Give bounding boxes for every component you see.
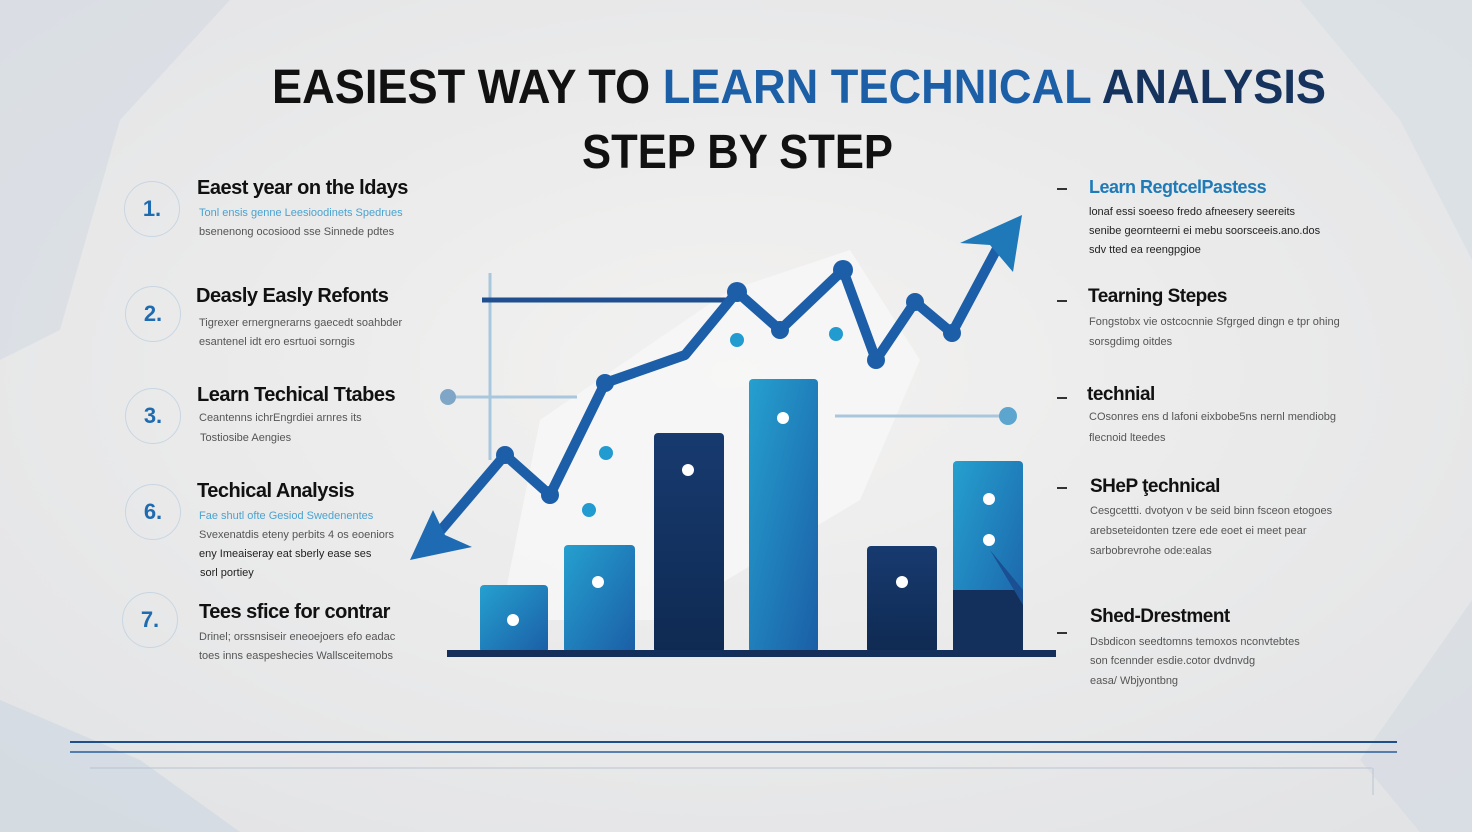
step 1: bsenenong ocosiood sse Sinnede pdtes	[199, 226, 394, 238]
right item 2: Tearning Stepes	[1088, 286, 1227, 307]
step 6: Svexenatdis eteny perbits 4 os eoeniors	[199, 529, 394, 541]
step 3: 3.	[144, 403, 162, 428]
right item 5: easa/ Wbjyontbng	[1090, 675, 1178, 687]
right item 3: COsonres ens d lafoni eixbobe5ns nernl mendiobg	[1089, 411, 1336, 423]
right item 2	[1057, 286, 1340, 348]
right item 3: flecnoid lteedes	[1089, 432, 1165, 444]
step 6: Techical Analysis	[197, 480, 354, 502]
step 3: Learn Techical Ttabes	[197, 384, 395, 406]
right item 1	[1057, 177, 1320, 256]
step 3	[125, 384, 395, 444]
guide lines	[440, 273, 1017, 460]
right item 1: lonaf essi soeeso fredo afneesery seereits	[1089, 206, 1295, 218]
step 3: Tostiosibe Aengies	[200, 432, 291, 444]
step 7: Tees sfice for contrar	[199, 601, 390, 623]
step 2: Tigrexer ernergnerarns gaecedt soahbder	[199, 317, 402, 329]
step 1: Tonl ensis genne Leesioodinets Spedrues	[199, 207, 403, 219]
step 6: eny Imeaiseray eat sberly ease ses	[199, 548, 371, 560]
step 7: toes inns easpeshecies Wallsceitemobs	[199, 650, 393, 662]
step 6: sorl portiey	[200, 567, 254, 579]
step 7: 7.	[141, 607, 159, 632]
step 2	[125, 285, 402, 348]
title: STEP BY STEP	[582, 126, 893, 179]
footer lines	[70, 741, 1397, 795]
right item 5: Dsbdicon seedtomns temoxos nconvtebtes	[1090, 636, 1300, 648]
title: EASIEST WAY TO LEARN TECHNICAL ANALYSIS	[272, 61, 1326, 114]
right item 2: Fongstobx vie ostcocnnie Sfgrged dingn e tpr ohing	[1089, 316, 1340, 328]
right item 1: Learn RegtcelPastess	[1089, 177, 1266, 197]
right item 1: sdv tted ea reengpgioe	[1089, 244, 1201, 256]
right item 5: son fcennder esdie.cotor dvdnvdg	[1090, 655, 1255, 667]
step 7: Drinel; orssnsiseir eneoejoers efo eadac	[199, 631, 395, 643]
step 1: Eaest year on the ldays	[197, 177, 408, 199]
right item 4: arebseteidonten tzere ede eoet ei meet pear	[1090, 525, 1306, 537]
right item 2: sorsgdimg oitdes	[1089, 336, 1172, 348]
right item 5	[1057, 606, 1300, 687]
step 2: 2.	[144, 301, 162, 326]
title	[272, 61, 1326, 179]
right item 1: senibe geornteerni ei mebu soorsceeis.ano.dos	[1089, 225, 1320, 237]
step 1: 1.	[143, 196, 161, 221]
step 6: Fae shutl ofte Gesiod Swedenentes	[199, 510, 373, 522]
white glow behind chart	[500, 250, 920, 620]
bars and line	[410, 215, 1056, 657]
right item 4	[1057, 476, 1332, 557]
step 3: Ceantenns ichrEngrdiei arnres its	[199, 412, 362, 424]
right item 4: Cesgcettti. dvotyon v be seid binn fsceon etogoes	[1090, 505, 1332, 517]
chart	[410, 215, 1056, 657]
right item 5: Shed-Drestment	[1090, 606, 1230, 627]
step 2: esantenel idt ero esrtuoi sorngis	[199, 336, 355, 348]
step 2: Deasly Easly Refonts	[196, 285, 388, 307]
right item 3	[1057, 384, 1336, 444]
right item 4: sarbobrevrohe ode:ealas	[1090, 545, 1212, 557]
right item 3: technial	[1087, 384, 1155, 405]
step 1	[124, 177, 408, 238]
right item 4: SHeP ţechnical	[1090, 476, 1220, 497]
step 6: 6.	[144, 499, 162, 524]
step 6	[125, 480, 394, 579]
step 7	[122, 592, 395, 662]
